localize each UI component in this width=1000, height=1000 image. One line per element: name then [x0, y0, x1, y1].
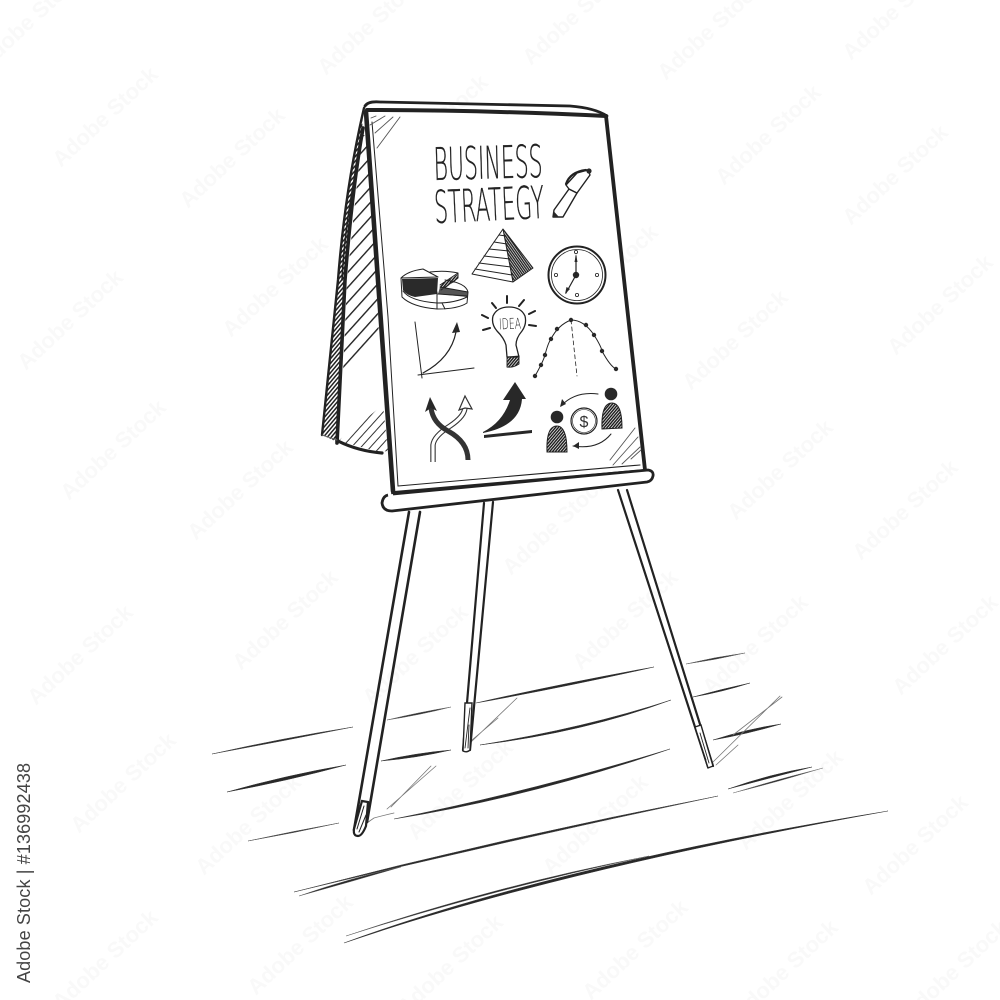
watermark: Adobe Stock: [227, 564, 343, 675]
board: front sheet frame: [365, 102, 645, 493]
watermark: Adobe Stock: [857, 789, 973, 900]
watermark: Adobe Stock: [357, 599, 473, 710]
watermark: Adobe Stock: [22, 599, 138, 710]
icon: pen: [553, 168, 592, 217]
icon: pyramid: [472, 229, 533, 282]
shine hatch: top-left corner: [370, 116, 400, 148]
title: [433, 135, 545, 234]
shine hatch: bottom-right corner: [610, 428, 641, 465]
watermark: Adobe Stock: [377, 69, 493, 180]
icon: idea light bulb: IDEA: [499, 315, 521, 333]
watermark: Adobe Stock: [182, 434, 298, 545]
watermark: Adobe Stock: [887, 589, 1000, 700]
watermark: Adobe Stock: [567, 564, 683, 675]
easel tray: [382, 470, 653, 511]
watermark: Adobe Stock: [242, 889, 358, 1000]
floor lines: [212, 653, 888, 943]
watermark: Adobe Stock: [847, 454, 963, 565]
icon: crossing arrows: [425, 396, 472, 463]
watermark: Adobe Stock: [402, 734, 518, 845]
watermark: Adobe Stock: [697, 589, 813, 700]
watermark: Adobe Stock: [217, 231, 333, 342]
watermark: Adobe Stock: [55, 394, 171, 505]
illustration canvas: STRATEGY: [433, 176, 545, 234]
watermark: Adobe Stock: [722, 414, 838, 525]
watermark: Adobe Stock: [174, 102, 290, 213]
stock image credit: Adobe Stock | #136992438: [14, 763, 34, 983]
watermark: Adobe Stock: [12, 264, 128, 375]
icon: clock: [548, 246, 606, 304]
watermark: Adobe Stock: [190, 769, 306, 880]
watermark: Adobe Stock: [47, 61, 163, 172]
watermark: Adobe Stock: [732, 744, 848, 855]
right leg: [618, 490, 713, 768]
icon: pie chart: [401, 269, 468, 309]
watermark: Adobe Stock: [710, 79, 826, 190]
watermark: Adobe Stock: [547, 219, 663, 330]
floor reflections of legs: [367, 696, 782, 823]
icon: bell curve: [533, 318, 618, 378]
watermark: Adobe Stock: [837, 119, 953, 230]
watermark: Adobe Stock: [65, 727, 181, 838]
left leg: [354, 512, 420, 836]
middle leg: [463, 502, 493, 752]
back pages of flip chart: [322, 108, 388, 453]
easel legs: [354, 490, 713, 836]
watermark: Adobe Stock: [497, 469, 613, 580]
watermark: Adobe Stock: [537, 769, 653, 880]
icon: money exchange between people: [547, 388, 622, 452]
icon: money exchange between people: $: [580, 414, 589, 431]
icon: idea light bulb: [482, 296, 536, 367]
watermark: Adobe Stock: [882, 249, 998, 360]
icon: rising arrow: [483, 382, 532, 438]
title: BUSINESS: [433, 135, 543, 191]
icon: line chart with arrow: [415, 322, 474, 378]
watermark: Adobe Stock: [677, 284, 793, 395]
